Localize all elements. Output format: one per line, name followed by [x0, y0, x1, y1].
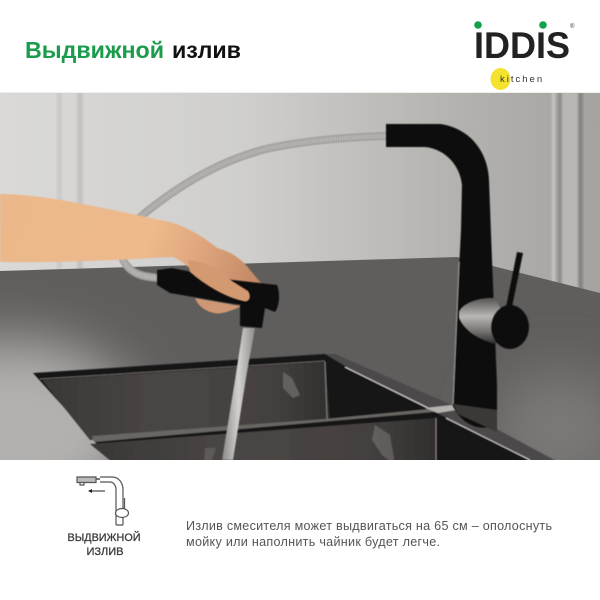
title [25, 37, 241, 63]
description text [186, 519, 552, 549]
logo: IDDIS kitchen: IDDIS [474, 25, 570, 66]
title: излив [172, 37, 241, 63]
description text: Излив смесителя может выдвигаться на 65 см – ополоснуть [186, 519, 552, 533]
title: Выдвижной [25, 37, 164, 63]
icon caption: ИЗЛИВ [86, 546, 124, 558]
icon caption: ВЫДВИЖНОЙ [68, 531, 140, 544]
hose [122, 136, 388, 278]
icon arrow [89, 490, 105, 492]
logo: IDDIS kitchen: kitchen [500, 74, 544, 85]
countertop [0, 257, 600, 460]
description text: мойку или наполнить чайник будет легче. [186, 535, 440, 549]
icon caption [68, 531, 140, 558]
sink [33, 354, 560, 465]
icon: pull-out spout faucet [77, 477, 128, 525]
arrowhead [88, 489, 92, 493]
water stream [222, 328, 255, 460]
logo: IDDIS kitchen: ® [570, 23, 575, 30]
photo: faucet with pulled-out spout over sink [0, 92, 600, 460]
faucet body [386, 124, 497, 432]
pull-out spray head [157, 268, 279, 328]
faucet handle [459, 252, 529, 349]
logo: IDDIS kitchen [474, 21, 575, 90]
wall [0, 91, 600, 302]
arm and hand [0, 194, 262, 313]
thumb [188, 260, 250, 301]
